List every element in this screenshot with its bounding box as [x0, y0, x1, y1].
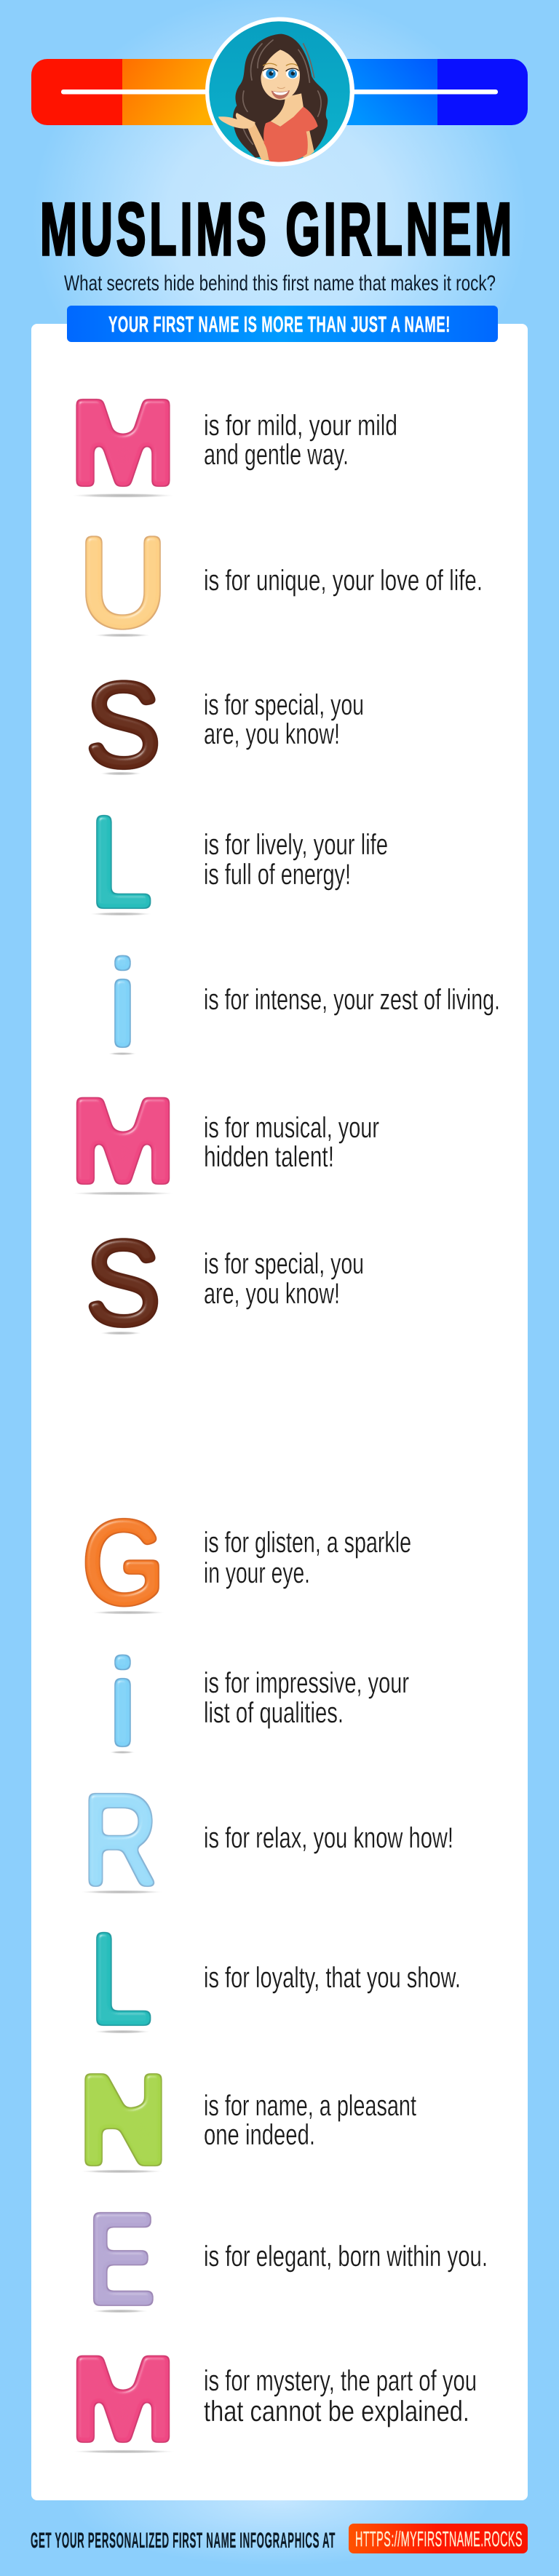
row: i intense [108, 937, 500, 1070]
icon: woman avatar [205, 17, 354, 166]
row: M mild: and gentle way. [204, 439, 349, 471]
row: M mild [68, 372, 397, 513]
row: G glisten: G [82, 1496, 164, 1629]
row: S special 2: is for special, you [204, 1248, 364, 1280]
row: E elegant [87, 2187, 488, 2331]
row: G glisten: in your eye. [204, 1557, 310, 1589]
row: S special: is for special, you [204, 689, 364, 721]
row: L lively: is full of energy! [204, 859, 351, 891]
header bar [31, 59, 528, 125]
row: M musical: is for musical, your [204, 1112, 379, 1144]
row: R relax [81, 1768, 453, 1912]
row: M musical [68, 1071, 379, 1211]
row: N name: is for name, a pleasant [204, 2090, 416, 2122]
row: U unique: U [79, 512, 167, 653]
row: i impressive: list of qualities. [204, 1697, 344, 1729]
panel: letters [31, 324, 528, 2500]
row: M mystery [68, 2329, 477, 2469]
row: M mystery: M [68, 2329, 178, 2469]
footer link button [349, 2524, 528, 2553]
row: M mild: M [68, 372, 178, 513]
row: L lively: L [90, 791, 152, 934]
row: L loyalty [90, 1908, 461, 2051]
row: R relax: is for relax, you know how! [204, 1822, 453, 1854]
row: N name: N [76, 2046, 170, 2195]
row: L loyalty: is for loyalty, that you show. [204, 1962, 461, 1994]
row: M musical: M [68, 1071, 178, 1211]
banner [67, 306, 498, 342]
row: L loyalty: L [90, 1908, 152, 2051]
row: L lively: is for lively, your life [204, 829, 388, 861]
row: S special [85, 658, 364, 792]
row: L lively [90, 791, 388, 934]
row: i impressive: is for impressive, your [204, 1667, 409, 1699]
row: S special: are, you know! [204, 718, 340, 750]
row: R relax: R [82, 1768, 158, 1912]
row: S special: S [85, 658, 161, 792]
row: i intense: i [109, 937, 136, 1070]
row: i impressive [109, 1636, 409, 1770]
row: N name: one indeed. [204, 2119, 315, 2151]
row: U unique [79, 512, 483, 653]
row: E elegant: E [87, 2187, 156, 2331]
row: M mystery: that cannot be explained. [204, 2396, 469, 2428]
row: M musical: hidden talent! [204, 1141, 334, 1173]
row: G glisten: is for glisten, a sparkle [204, 1527, 411, 1559]
row: S special 2: S [85, 1216, 161, 1351]
row: M mild: is for mild, your mild [204, 410, 397, 442]
row: S special 2 [85, 1216, 364, 1351]
row: i impressive: i [109, 1636, 136, 1770]
row: S special 2: are, you know! [204, 1278, 340, 1310]
row: G glisten [82, 1496, 411, 1629]
row: N name [76, 2046, 416, 2195]
